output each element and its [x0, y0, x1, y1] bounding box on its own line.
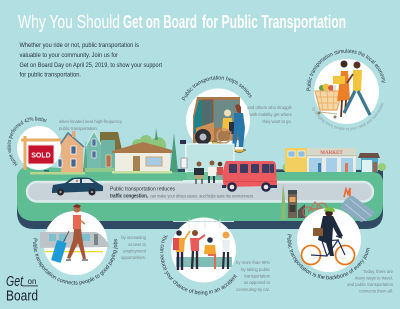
- train: [40, 232, 110, 252]
- white circle: shoppers: [314, 59, 379, 124]
- man in yellow shirt: [344, 62, 370, 115]
- waiting person right: [217, 162, 223, 178]
- white circle: cyclist: [297, 207, 361, 272]
- road text: traffic congestion,: [110, 194, 148, 200]
- note: accident: by taking public: [241, 267, 270, 272]
- market buildings: [282, 148, 386, 172]
- note: jobs: access to: [128, 242, 147, 247]
- sold sign: SOLD: [31, 152, 51, 160]
- road text: Public transportation reduces: [110, 186, 175, 192]
- logo: Get on Board: Get: [6, 273, 24, 290]
- sold sign post: [21, 136, 61, 170]
- seated rider with laptop: [204, 237, 216, 269]
- bicycle: [302, 236, 354, 264]
- note: accident: by more than 90%: [236, 260, 270, 265]
- note: seniors: and others who struggle: [247, 105, 293, 110]
- note: accident: commuting by car.: [236, 287, 270, 292]
- intro text: Get on Board Day on April 25, 2019, to show your support: [20, 62, 162, 69]
- rider with orange hair: [222, 232, 230, 269]
- title: Get on Board: [123, 12, 197, 32]
- logo: Get on Board: Board: [6, 288, 38, 304]
- hand straps: [189, 219, 220, 228]
- rider with backpack: [173, 230, 190, 270]
- note: jobs: by increasing: [121, 235, 147, 240]
- curved label: seniors: Public transportation helps seniors: [182, 75, 252, 101]
- note: home values: when located near high-frequency: [59, 119, 123, 124]
- curved label: local economy: Public transportation stimulates the local economy: [306, 48, 386, 91]
- note: accident: as opposed to: [244, 280, 271, 285]
- white circle: riders on transit: [171, 218, 236, 282]
- bus stop with waiting riders: [180, 140, 234, 184]
- seats: [176, 257, 232, 267]
- woman in orange dress: [333, 60, 350, 117]
- curved label: jobs: Public transportation connects people to good paying jobs: [33, 238, 118, 286]
- white circle: seniors with bus: [186, 88, 250, 153]
- platform: green ground with road: [17, 166, 383, 229]
- traveler woman: [51, 204, 88, 263]
- note: backbone: and public transportation: [347, 282, 394, 287]
- note: jobs: employment: [123, 248, 147, 254]
- market buildings: MARKET: [320, 151, 343, 156]
- curved note: local economy: by bringing more people to your retail and businesses.: [312, 102, 384, 131]
- intro text: for public transportation.: [20, 72, 81, 78]
- teal house with trees: [83, 131, 122, 172]
- logo: Get on Board: on: [28, 277, 36, 286]
- note: backbone: many ways to travel,: [355, 276, 393, 280]
- logo: Get on Board: [6, 273, 38, 304]
- white circle: home value with sold sign: [17, 126, 61, 172]
- road text: can make your drives easier, and helps save the environment.: [150, 194, 254, 198]
- curved label: home values: Home values performed 42% better: [6, 116, 47, 166]
- note: seniors: with mobility get where: [250, 112, 293, 117]
- curved label: accident: You can reduce your chance of being in an accident: [160, 235, 237, 296]
- red bus: [222, 161, 277, 192]
- intro text: valuable to your community. Join us for: [20, 52, 119, 59]
- note: home values: public transportation.: [59, 126, 98, 131]
- caregiver standing: [232, 104, 245, 150]
- wheelchair bus: [193, 97, 246, 153]
- note: backbone: connects them all.: [359, 288, 393, 294]
- senior in wheelchair: [216, 110, 235, 143]
- note: accident: transportation: [244, 274, 271, 278]
- curved label: backbone: Public transportation is the backbone of every journey: [287, 234, 370, 280]
- brick house: [30, 131, 85, 174]
- white house with brown roof and trees: [112, 128, 178, 174]
- note: seniors: they want to go.: [262, 119, 292, 124]
- note: backbone: Today, there are: [363, 269, 394, 274]
- title: Why You Should: [18, 12, 120, 32]
- rider in red: [190, 230, 205, 269]
- white circle: train and traveler: [40, 204, 110, 275]
- intro text: Whether you ride or not, public transportation is: [20, 42, 140, 49]
- waiting person middle: [208, 160, 216, 183]
- shopping cart: [315, 84, 345, 118]
- note: jobs: opportunities.: [121, 255, 146, 260]
- metro station with bikes and ticket machine: [281, 184, 375, 222]
- car: [52, 178, 103, 196]
- cyclist: [313, 207, 343, 256]
- waiting person left: [194, 162, 204, 184]
